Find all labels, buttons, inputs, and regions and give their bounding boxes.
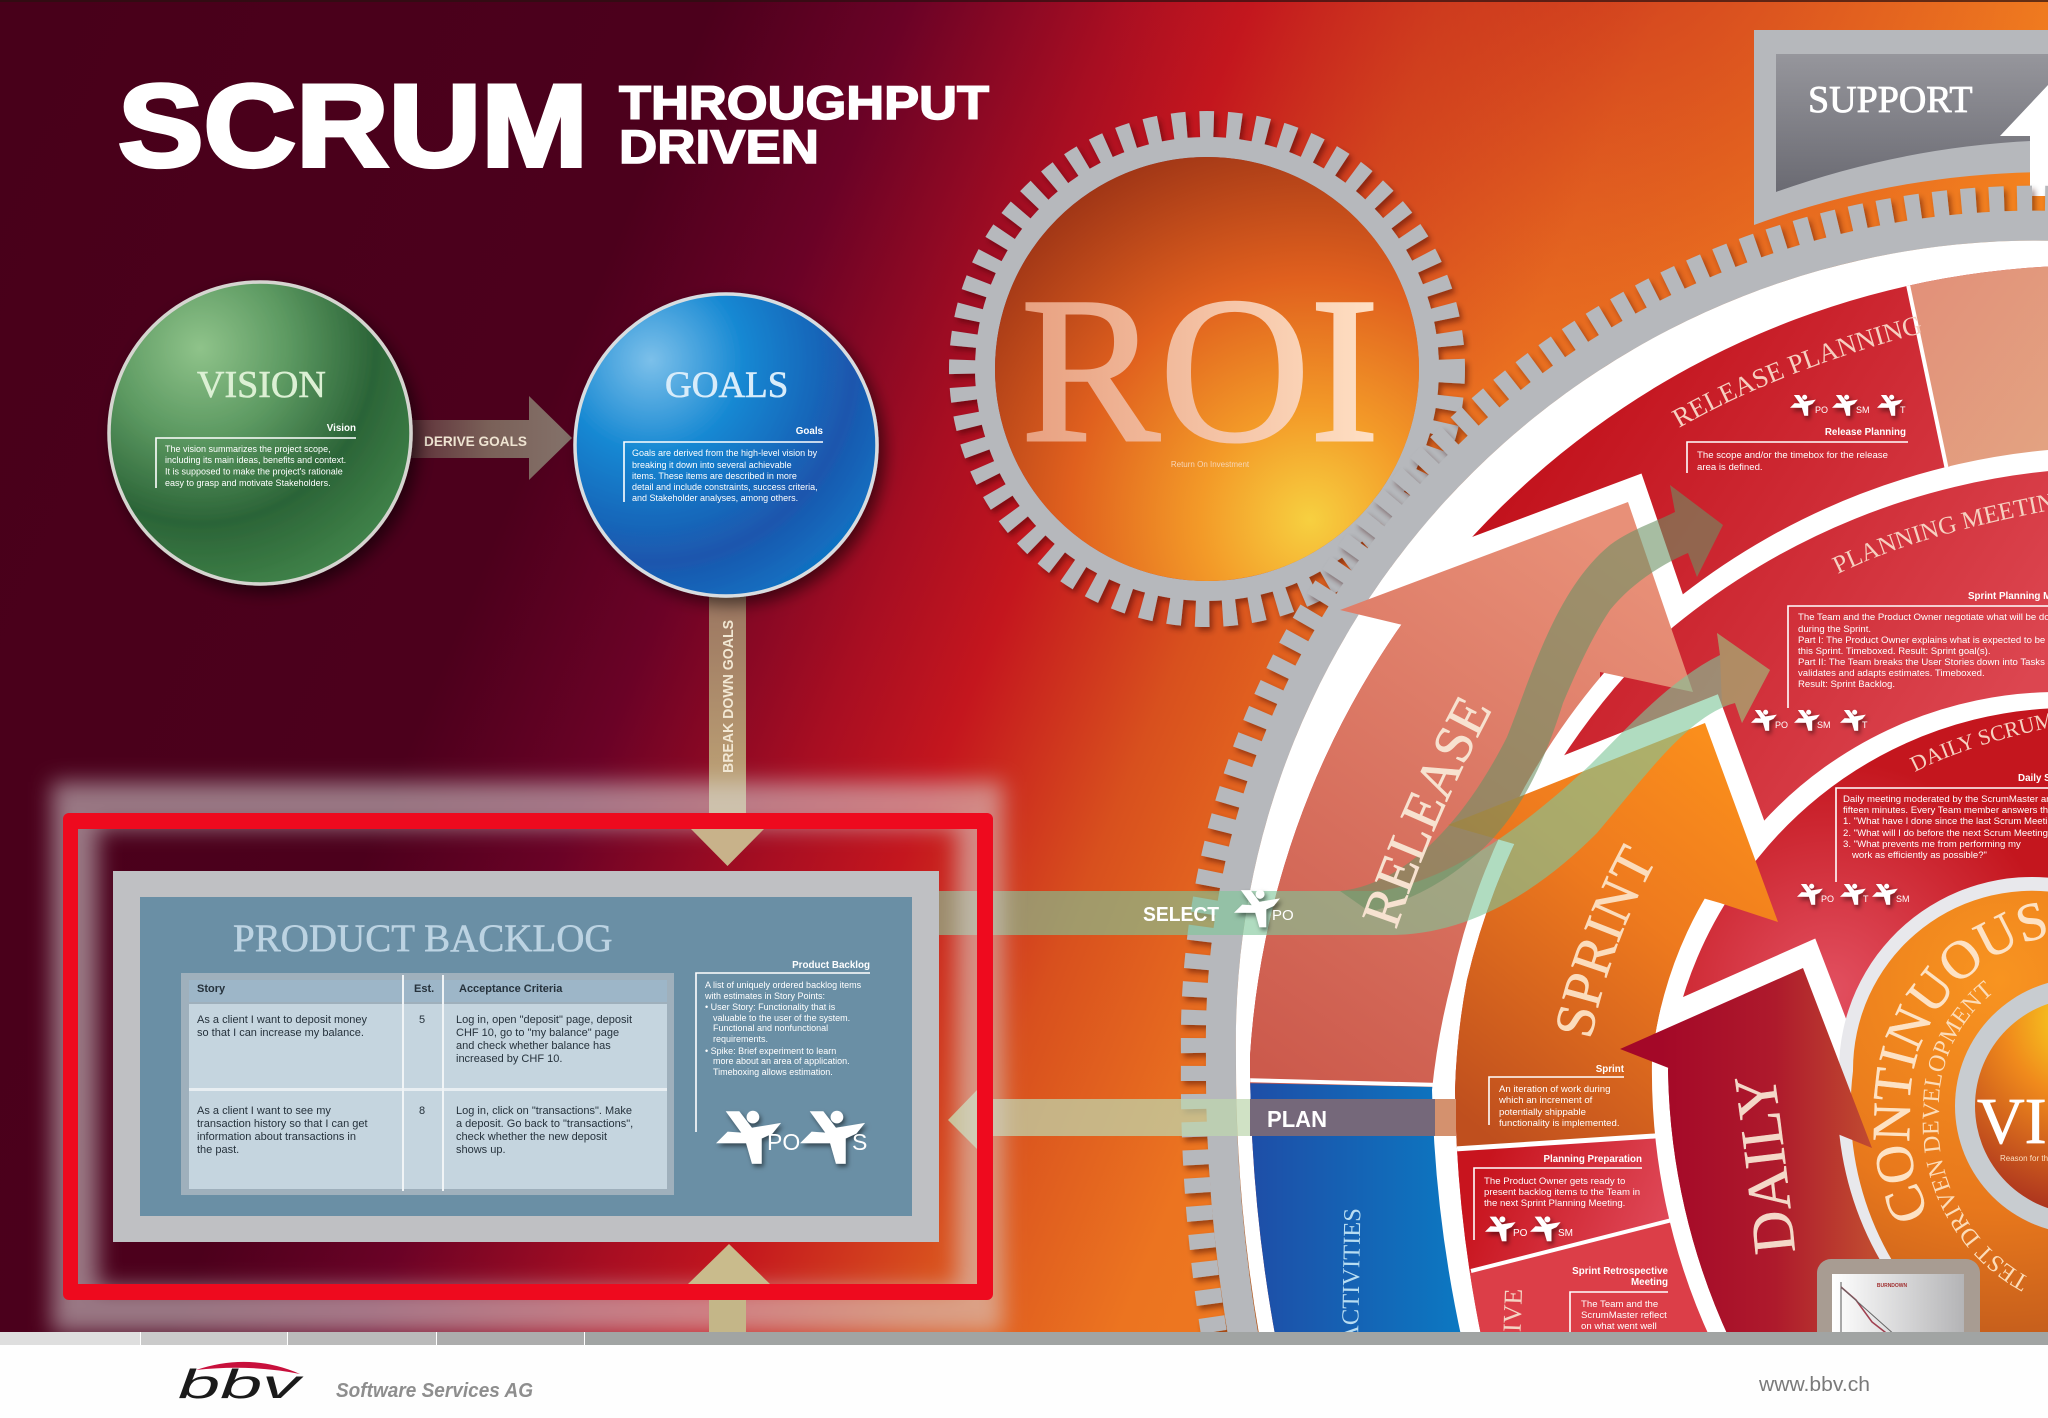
panel: sprint description: An iteration of work during xyxy=(1499,1084,1610,1095)
arrow: derive goals xyxy=(405,396,572,480)
arrowhead: break down goals into backlog xyxy=(691,829,764,866)
select label with product owner icon xyxy=(1143,890,1294,927)
title: DRIVEN xyxy=(619,120,819,173)
band label: daily xyxy=(1734,1078,1796,1254)
background top tint xyxy=(1000,0,2048,440)
ring: continuous xyxy=(1839,877,2048,1332)
logo: bbv xyxy=(178,1361,533,1407)
side description: • Spike: Brief experiment to learn xyxy=(705,1046,836,1056)
side description: valuable to the user of the system. xyxy=(713,1013,850,1023)
title: THROUGHPUT xyxy=(619,76,989,129)
white spiral separator xyxy=(1432,449,2048,1340)
panel: sprint retrospective: Meeting xyxy=(1631,1277,1668,1288)
website: www.bbv.ch xyxy=(1758,1374,1870,1396)
panel: planning preparation: PO xyxy=(1513,1228,1528,1239)
gear: ROI: Return On Investment xyxy=(1171,460,1250,469)
table: stories xyxy=(181,973,674,1195)
disc: vision center xyxy=(1955,978,2048,1234)
arrow: derive goals: DERIVE GOALS xyxy=(424,433,527,449)
circle: vision: The vision summarizes the project scope, xyxy=(165,444,331,454)
panel: planning meeting: PO xyxy=(1775,720,1788,730)
panel: sprint retrospective: Sprint Retrospective xyxy=(1572,1266,1669,1277)
table: stories: shows up. xyxy=(456,1144,506,1156)
band: release xyxy=(1200,240,2048,1340)
panel: sprint retrospective: on what went well xyxy=(1581,1321,1657,1332)
circle: goals: items. These items are described in more xyxy=(632,471,797,481)
table: stories: As a client I want to see my xyxy=(197,1105,331,1117)
table: stories: Acceptance Criteria xyxy=(459,983,563,995)
logo: bbv: bbv xyxy=(178,1361,305,1407)
translucent arrow: select to planning meeting xyxy=(939,633,1770,935)
panel: daily scrum: SM xyxy=(1896,894,1910,904)
white outline: sprint head xyxy=(1520,694,1764,839)
panel: planning meeting: validates and adapts estimates. Timeboxed. xyxy=(1798,668,1985,679)
panel: sprint description: potentially shippable xyxy=(1499,1107,1586,1118)
panel: daily scrum: work as efficiently as possible?" xyxy=(1851,850,1987,861)
side description xyxy=(696,960,870,1132)
top edge xyxy=(0,0,2048,2)
support box: SUPPORT xyxy=(1808,79,1973,121)
arrowhead: release xyxy=(1340,502,1693,692)
ring: continuous: TEST DRIVEN DEVELOPMENT xyxy=(1922,980,2027,1292)
circle: vision: It is supposed to make the project's rationale xyxy=(165,466,343,476)
table: stories: the past. xyxy=(197,1144,239,1156)
table: stories: check whether the new deposit xyxy=(456,1131,607,1143)
band label: daily: DAILY xyxy=(1734,1078,1796,1254)
circle: goals xyxy=(575,294,877,596)
burndown chart xyxy=(1817,1259,1980,1359)
panel: sprint retrospective: ScrumMaster reflect xyxy=(1581,1310,1667,1321)
panel: release planning: The scope and/or the timebox for the release xyxy=(1697,450,1888,461)
panel: release planning xyxy=(1671,316,1921,473)
panel: sprint retrospective: The Team and the xyxy=(1581,1299,1658,1310)
glow around product backlog frame xyxy=(75,805,980,1310)
gear: ROI xyxy=(963,125,1451,613)
panel: daily scrum: PO xyxy=(1821,894,1834,904)
arrow: break down goals: BREAK DOWN GOALS xyxy=(721,620,737,773)
circle: goals: GOALS xyxy=(665,365,788,406)
band label: release: RELEASE xyxy=(1362,696,1492,929)
panel: sprint description: Sprint xyxy=(1596,1064,1625,1075)
gear: ROI: ROI xyxy=(1021,255,1379,485)
panel: product backlog: PRODUCT BACKLOG xyxy=(233,917,613,960)
panel: daily scrum xyxy=(1797,713,2048,910)
panel: release planning: area is defined. xyxy=(1697,462,1763,473)
panel: release planning: RELEASE PLANNING xyxy=(1671,316,1921,428)
panel: planning meeting xyxy=(1751,494,2048,736)
panel: planning preparation xyxy=(1474,1154,1642,1241)
support box xyxy=(1754,30,2048,225)
side description: with estimates in Story Points: xyxy=(704,991,825,1001)
icons: product owner and stakeholder xyxy=(716,1111,867,1164)
panel: planning meeting: during the Sprint. xyxy=(1798,624,1871,635)
panel: product backlog xyxy=(113,871,939,1242)
circle: goals: Goals are derived from the high-level vision by xyxy=(632,448,818,458)
large gear ring xyxy=(1194,199,2048,1340)
panel: planning meeting: Result: Sprint Backlog. xyxy=(1798,679,1895,690)
circle: vision: easy to grasp and motivate Stakeholders. xyxy=(165,478,331,488)
circle: vision xyxy=(109,282,411,584)
table: stories: so that I can increase my balance. xyxy=(197,1027,364,1039)
panel: release planning: Release Planning xyxy=(1825,427,1906,438)
panel: release planning: PO xyxy=(1815,405,1828,415)
band: sprint xyxy=(1440,460,2048,1340)
circle: vision: Vision xyxy=(327,423,356,434)
circle: goals: Goals xyxy=(796,426,824,437)
spiral inner white xyxy=(1236,241,2048,1340)
circle: goals: and Stakeholder analyses, among others. xyxy=(632,493,798,503)
circle: vision: VISION xyxy=(197,364,326,406)
circle: goals: breaking it down into several achievable xyxy=(632,460,792,470)
title: SCRUM xyxy=(118,60,588,191)
band: daily xyxy=(1668,708,2048,1332)
circle: goals: detail and include constraints, success criteria, xyxy=(632,482,818,492)
panel: planning preparation: Planning Preparation xyxy=(1543,1154,1642,1165)
table: stories: As a client I want to deposit money xyxy=(197,1014,367,1026)
table: stories: 8 xyxy=(419,1105,425,1117)
side description: Product Backlog xyxy=(792,960,870,971)
side description: requirements. xyxy=(713,1034,768,1044)
panel: planning meeting: T xyxy=(1862,720,1868,730)
white outline: daily head xyxy=(1656,938,1846,1063)
panel: release planning: SM xyxy=(1856,405,1870,415)
table: stories: Log in, click on "transactions". Make xyxy=(456,1105,632,1117)
panel: planning preparation: The Product Owner gets ready to xyxy=(1484,1176,1625,1187)
panel: sprint description: functionality is implemented. xyxy=(1499,1118,1620,1129)
select label with product owner icon: SELECT xyxy=(1143,903,1219,926)
panel: daily scrum: 3. "What prevents me from performing my xyxy=(1843,839,2021,850)
white outline: release head xyxy=(1350,474,1683,630)
side description: • User Story: Functionality that is xyxy=(705,1002,836,1012)
side description: Functional and nonfunctional xyxy=(713,1023,828,1033)
panel: planning preparation: the next Sprint Planning Meeting. xyxy=(1484,1198,1625,1209)
panel: sprint retrospective xyxy=(1570,1266,1669,1340)
arrow: break down goals xyxy=(709,590,746,820)
panel: planning preparation: SM xyxy=(1558,1228,1573,1239)
table: stories: transaction history so that I can get xyxy=(197,1118,368,1130)
burndown chart: BURNDOWN xyxy=(1877,1283,1908,1289)
arrowhead: sprint xyxy=(1448,723,1778,922)
panel: daily scrum: T xyxy=(1863,894,1869,904)
circle: vision: including its main ideas, benefits and context. xyxy=(165,455,346,465)
red frame xyxy=(63,813,993,1300)
arrowhead: daily xyxy=(1620,968,1872,1148)
arrow: from below into backlog xyxy=(688,1244,770,1332)
arrow: plan: PLAN xyxy=(1267,1106,1327,1132)
logo: bbv: Software Services AG xyxy=(336,1380,533,1402)
icons: product owner and stakeholder: PO xyxy=(767,1129,800,1155)
table: stories: Est. xyxy=(414,983,434,995)
side description: Timeboxing allows estimation. xyxy=(713,1067,833,1077)
translucent arrow: to release planning xyxy=(1340,485,1723,912)
side description: more about an area of application. xyxy=(713,1056,850,1066)
select label with product owner icon: PO xyxy=(1272,907,1294,924)
panel: release planning: T xyxy=(1900,405,1906,415)
title xyxy=(118,60,989,191)
white spiral separator xyxy=(1652,692,2048,1340)
panel: sprint description xyxy=(1489,1064,1625,1129)
side description: A list of uniquely ordered backlog items xyxy=(705,980,862,990)
panel: planning meeting: SM xyxy=(1817,720,1830,730)
table: stories: 5 xyxy=(419,1014,425,1026)
band label: activities: ACTIVITIES xyxy=(1337,1208,1366,1343)
arrow: plan xyxy=(948,1090,1456,1149)
table: stories: Story xyxy=(197,983,226,995)
table: stories: and check whether balance has xyxy=(456,1040,611,1052)
table: stories: increased by CHF 10. xyxy=(456,1053,562,1065)
panel: planning preparation: present backlog items to the Team in xyxy=(1484,1187,1640,1198)
panel: planning meeting: this Sprint. Timeboxed. Result: Sprint goal(s). xyxy=(1798,646,1990,657)
panel: sprint description: which an increment of xyxy=(1498,1095,1593,1106)
band label: sprint: SPRINT xyxy=(1557,843,1654,1036)
icons: product owner and stakeholder: S xyxy=(852,1129,867,1155)
band label: retrospective: IVE xyxy=(1498,1288,1528,1333)
table: stories: Log in, open "deposit" page, deposit xyxy=(456,1014,632,1026)
footer bar xyxy=(0,1332,2048,1418)
table: stories: a deposit. Go back to "transactions", xyxy=(456,1118,633,1130)
table: stories: CHF 10, go to "my balance" page xyxy=(456,1027,619,1039)
table: stories: information about transactions in xyxy=(197,1131,356,1143)
